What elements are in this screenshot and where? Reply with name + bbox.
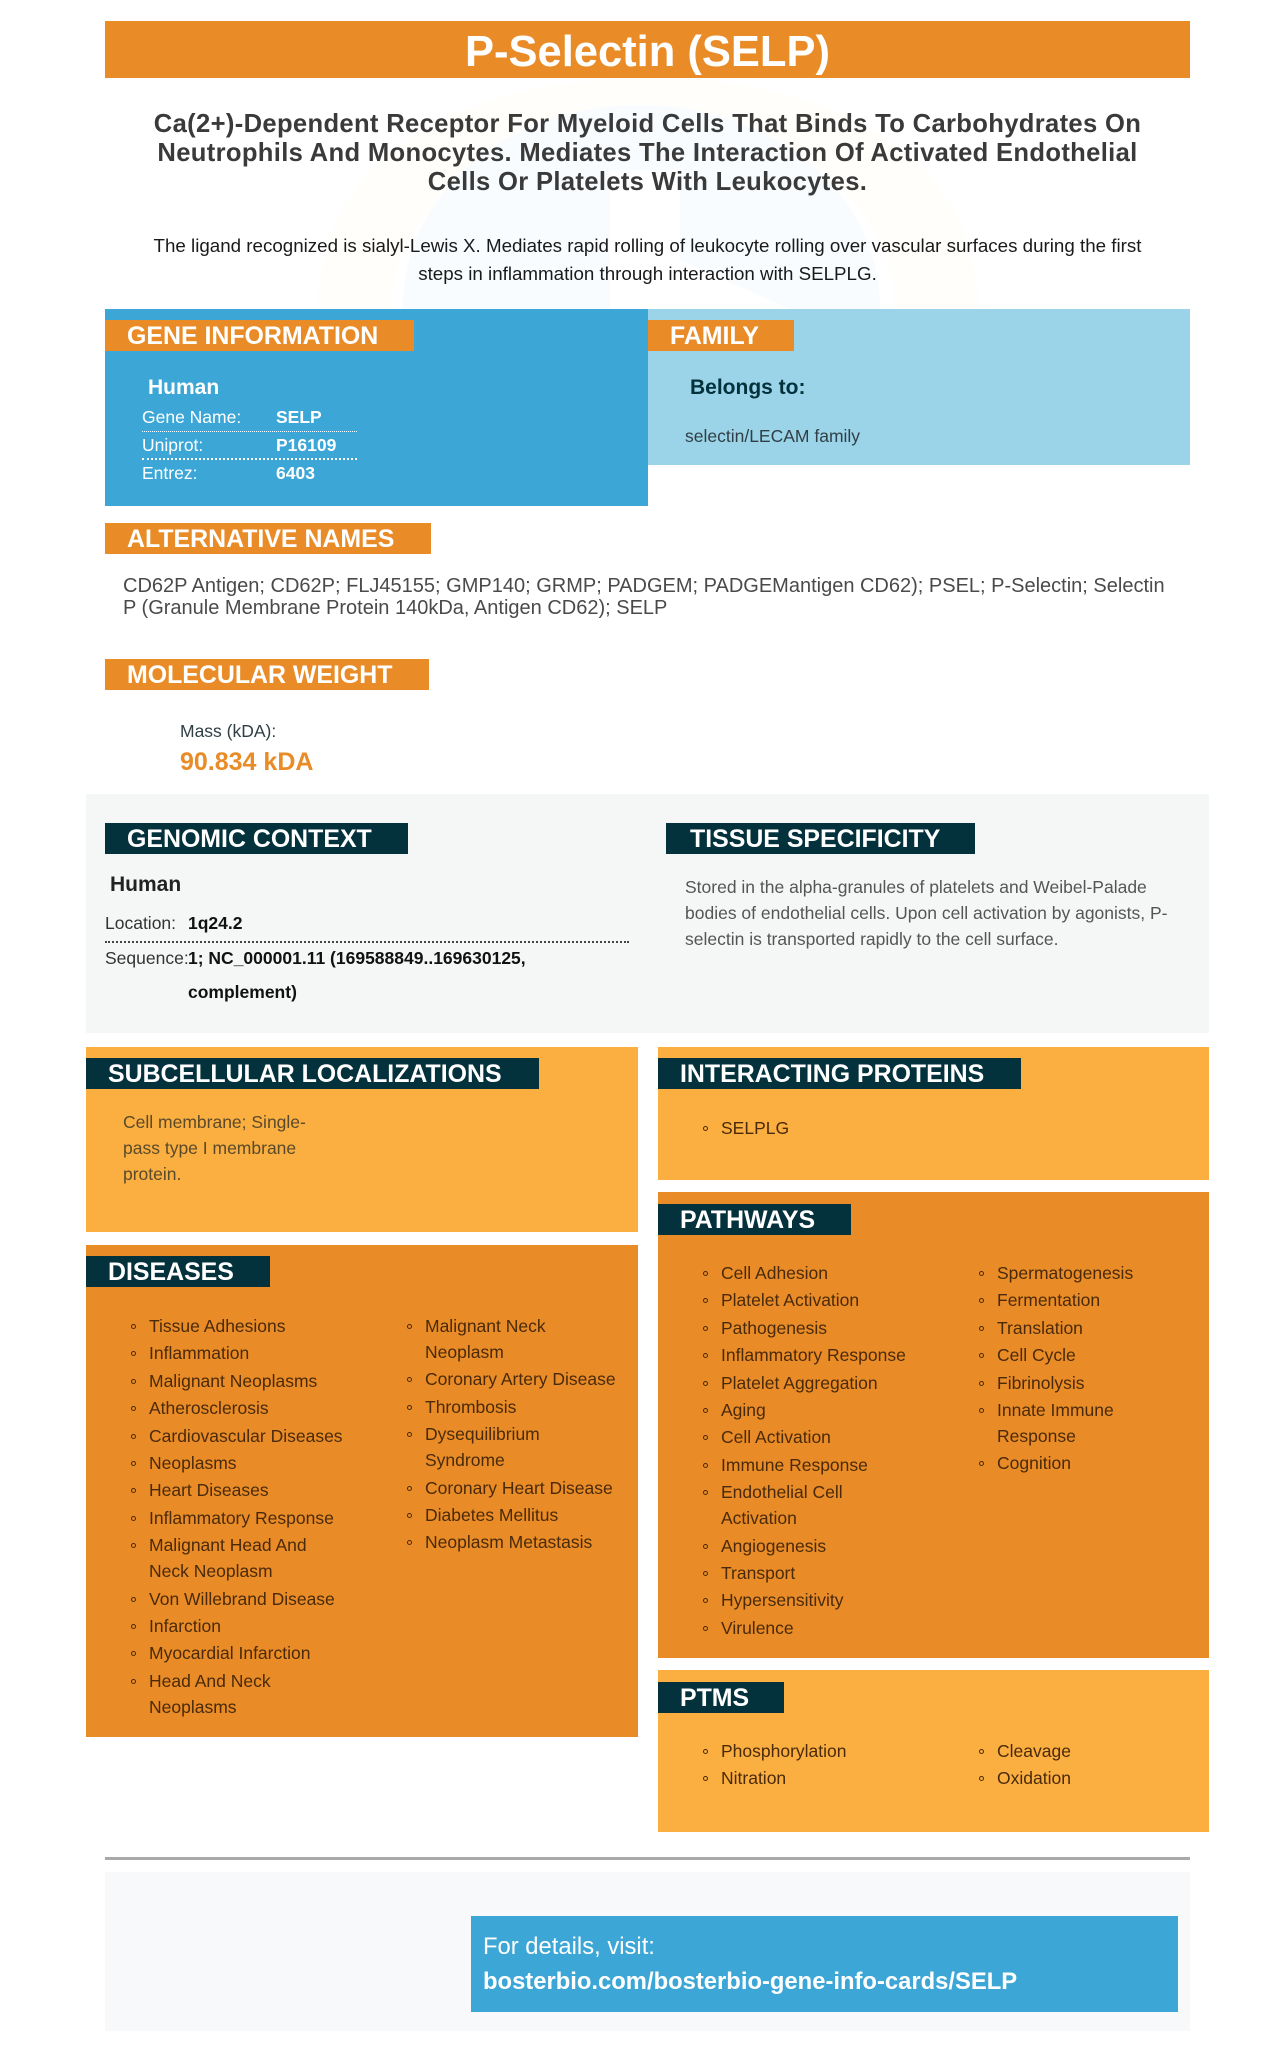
pathways list column 2: [979, 1263, 1133, 1473]
diseases list column 2: Thrombosis: [425, 1397, 516, 1417]
location row: [105, 913, 242, 933]
pathways list column 1: Cell Adhesion: [721, 1263, 828, 1283]
pathways list column 1: Aging: [721, 1400, 766, 1420]
alternative names text: [123, 575, 1165, 619]
subcellular text: pass type I membrane: [123, 1138, 296, 1158]
tissue specificity text: bodies of endothelial cells. Upon cell activation by agonists, P-: [685, 903, 1168, 923]
pathways list column 2: Cell Cycle: [997, 1345, 1076, 1365]
diseases list column 2: [407, 1316, 616, 1552]
callout: details link: For details, visit:: [483, 1933, 655, 1960]
heading: pathways: [658, 1204, 851, 1235]
title: [105, 21, 1190, 78]
gene table: Uniprot:: [142, 435, 203, 455]
callout: details link: [471, 1916, 1178, 2012]
heading: PTMs: [658, 1682, 784, 1713]
pathways list column 1: Angiogenesis: [721, 1536, 826, 1556]
diseases list column 1: Inflammatory Response: [149, 1508, 334, 1528]
pathways list column 2: Cognition: [997, 1453, 1071, 1473]
diseases list column 1: Neoplasms: [149, 1697, 237, 1717]
pathways list column 2: Innate Immune: [997, 1400, 1114, 1420]
heading: molecular weight: MOLECULAR WEIGHT: [127, 661, 392, 689]
PTMs list column 1: Nitration: [721, 1768, 786, 1788]
heading: family: FAMILY: [670, 322, 759, 350]
description: steps in inflammation through interaction with SELPLG.: [418, 263, 877, 284]
pathways list column 2: Fibrinolysis: [997, 1373, 1085, 1393]
family value: selectin/LECAM family: [685, 426, 860, 446]
pathways list column 1: Cell Activation: [721, 1427, 831, 1447]
pathways list column 1: Inflammatory Response: [721, 1345, 906, 1365]
interacting proteins list: SELPLG: [721, 1118, 789, 1138]
pathways list column 1: Immune Response: [721, 1455, 868, 1475]
sequence row: [105, 948, 526, 1002]
heading: family: [648, 320, 794, 351]
pathways list column 1: Activation: [721, 1508, 797, 1528]
subtitle: Cells Or Platelets With Leukocytes.: [428, 168, 867, 196]
pathways list column 1: Pathogenesis: [721, 1318, 827, 1338]
subcellular text: protein.: [123, 1164, 181, 1184]
pathways list column 1: Virulence: [721, 1618, 794, 1638]
pathways list column 2: Response: [997, 1426, 1076, 1446]
heading: alternative names: ALTERNATIVE NAMES: [127, 525, 394, 553]
subtitle: Ca(2+)-Dependent Receptor For Myeloid Cells That Binds To Carbohydrates On: [154, 110, 1141, 138]
panel: PTMs: [658, 1670, 1209, 1832]
diseases list column 1: [131, 1316, 343, 1717]
panel: diseases: [86, 1245, 638, 1737]
sequence row: complement): [188, 982, 297, 1002]
location row: 1q24.2: [188, 913, 242, 933]
tissue specificity text: selectin is transported rapidly to the cell surface.: [685, 929, 1059, 949]
diseases list column 1: Head And Neck: [149, 1671, 271, 1691]
tissue specificity text: [685, 877, 1168, 949]
diseases list column 1: Cardiovascular Diseases: [149, 1426, 343, 1446]
diseases list column 2: Coronary Heart Disease: [425, 1478, 613, 1498]
heading: interacting proteins: INTERACTING PROTEINS: [680, 1060, 984, 1088]
heading: diseases: [86, 1256, 270, 1287]
watermark logo: [0, 0, 1288, 309]
sequence row: Sequence:: [105, 948, 189, 968]
diseases list column 1: Inflammation: [149, 1343, 249, 1363]
diseases list column 2: Malignant Neck: [425, 1316, 546, 1336]
diseases list column 1: Infarction: [149, 1616, 221, 1636]
diseases list column 2: Neoplasm Metastasis: [425, 1532, 592, 1552]
heading: tissue specificity: TISSUE SPECIFICITY: [690, 825, 940, 853]
diseases list column 1: Neoplasms: [149, 1453, 237, 1473]
diseases list column 2: Dysequilibrium: [425, 1424, 540, 1444]
diseases list column 1: Malignant Head And: [149, 1535, 307, 1555]
gene table: Gene Name:: [142, 407, 241, 427]
diseases list column 1: Tissue Adhesions: [149, 1316, 286, 1336]
panel: subcellular localizations: [86, 1047, 638, 1232]
gene table: SELP: [276, 407, 322, 427]
PTMs list column 2: Oxidation: [997, 1768, 1071, 1788]
panel: genomic context and tissue specificity: [86, 794, 1209, 1033]
panel: footer: [105, 1872, 1190, 2031]
description: The ligand recognized is sialyl-Lewis X. Mediates rapid rolling of leukocyte rolling over vascular surfaces during the first: [154, 235, 1141, 256]
diseases list column 2: Diabetes Mellitus: [425, 1505, 558, 1525]
gene table: Entrez:: [142, 463, 197, 483]
heading: diseases: DISEASES: [108, 1258, 234, 1286]
PTMs list column 1: Phosphorylation: [721, 1741, 846, 1761]
pathways list column 1: Platelet Activation: [721, 1290, 859, 1310]
PTMs list column 2: [979, 1741, 1071, 1788]
heading: pathways: PATHWAYS: [680, 1206, 815, 1234]
subtitle: Neutrophils And Monocytes. Mediates The Interaction Of Activated Endothelial: [157, 139, 1138, 167]
heading: subcellular localizations: SUBCELLULAR LOCALIZATIONS: [108, 1060, 502, 1088]
subcellular text: Cell membrane; Single-: [123, 1112, 306, 1132]
location row: Location:: [105, 913, 176, 933]
title: P-Selectin (SELP): [465, 28, 830, 76]
PTMs list column 1: [703, 1741, 846, 1788]
pathways list column 2: Fermentation: [997, 1290, 1100, 1310]
PTMs list column 2: Cleavage: [997, 1741, 1071, 1761]
gene table: [142, 407, 357, 483]
panel: gene information: [105, 309, 648, 506]
diseases list column 1: Neck Neoplasm: [149, 1561, 273, 1581]
species label: Human: [148, 376, 219, 399]
diseases list column 2: Coronary Artery Disease: [425, 1369, 616, 1389]
tissue specificity text: Stored in the alpha-granules of platelets and Weibel-Palade: [685, 877, 1147, 897]
pathways list column 1: Transport: [721, 1563, 795, 1583]
heading: genomic context: GENOMIC CONTEXT: [127, 825, 372, 853]
pathways list column 1: Hypersensitivity: [721, 1590, 844, 1610]
panel: pathways: [658, 1192, 1209, 1658]
diseases list column 1: Atherosclerosis: [149, 1398, 269, 1418]
sequence row: 1; NC_000001.11 (169588849..169630125,: [188, 948, 526, 968]
gene table: 6403: [276, 463, 315, 483]
subtitle: [154, 110, 1141, 196]
subcellular text: [123, 1112, 306, 1184]
mass value: 90.834 kDA: [180, 748, 313, 776]
pathways list column 2: Translation: [997, 1318, 1083, 1338]
diseases list column 1: Myocardial Infarction: [149, 1643, 310, 1663]
panel: interacting proteins: [658, 1047, 1209, 1180]
diseases list column 1: Von Willebrand Disease: [149, 1589, 335, 1609]
diseases list column 2: Syndrome: [425, 1450, 505, 1470]
pathways list column 1: Platelet Aggregation: [721, 1373, 878, 1393]
callout: details link: bosterbio.com/bosterbio-gene-info-cards/SELP: [483, 1968, 1017, 1995]
mass label: Mass (kDA):: [180, 721, 276, 741]
species label: Human: [110, 873, 181, 896]
diseases list column 2: Neoplasm: [425, 1342, 504, 1362]
belongs to label: Belongs to:: [690, 376, 806, 399]
diseases list column 1: Heart Diseases: [149, 1480, 269, 1500]
description: [154, 235, 1142, 284]
alternative names text: CD62P Antigen; CD62P; FLJ45155; GMP140; GRMP; PADGEM; PADGEMantigen CD62); PSEL; P-Selectin; Selectin: [123, 575, 1165, 597]
alternative names text: P (Granule Membrane Protein 140kDa, Antigen CD62); SELP: [123, 597, 667, 619]
heading: PTMs: PTMS: [680, 1684, 749, 1712]
heading: gene information: GENE INFORMATION: [127, 322, 378, 350]
pathways list column 1: [703, 1263, 906, 1638]
diseases list column 1: Malignant Neoplasms: [149, 1371, 317, 1391]
pathways list column 2: Spermatogenesis: [997, 1263, 1133, 1283]
pathways list column 1: Endothelial Cell: [721, 1482, 843, 1502]
panel: family: [648, 309, 1190, 465]
gene table: P16109: [276, 435, 336, 455]
